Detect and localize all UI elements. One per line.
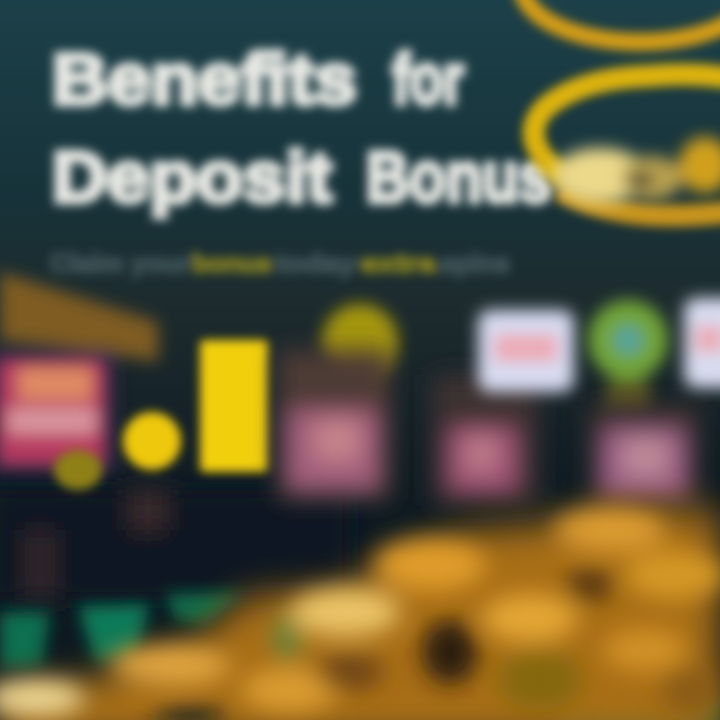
- title: [52, 40, 552, 218]
- subtitle: bonus: [192, 248, 272, 278]
- gold coin pile: [0, 510, 720, 720]
- title: Benefits: [52, 40, 357, 120]
- title: Bonus: [366, 138, 552, 218]
- icon: right screen card: [684, 298, 720, 388]
- icon: gold rings: [522, 0, 720, 216]
- panel: left slot machine: [0, 272, 158, 475]
- panel: right slot machine one: [432, 375, 538, 505]
- subtitle: today: [276, 248, 357, 278]
- subtitle: Claim your: [50, 248, 190, 278]
- panel: right slot machine two: [590, 405, 698, 510]
- icon: screen card: [478, 310, 574, 392]
- coin details: [0, 508, 720, 720]
- panel: centre slot machine: [278, 350, 390, 500]
- title: for: [392, 40, 464, 120]
- subtitle: [50, 248, 510, 278]
- subtitle: spins: [440, 248, 510, 278]
- ring highlight: [552, 137, 720, 204]
- icon: green badge: [588, 300, 668, 414]
- green felt table: [0, 592, 720, 720]
- title: Deposit: [52, 138, 332, 218]
- icon: yellow bar chart: [54, 340, 268, 490]
- dark column left: [0, 490, 350, 600]
- subtitle: extra: [360, 248, 437, 278]
- icon: yellow badge: [322, 304, 398, 398]
